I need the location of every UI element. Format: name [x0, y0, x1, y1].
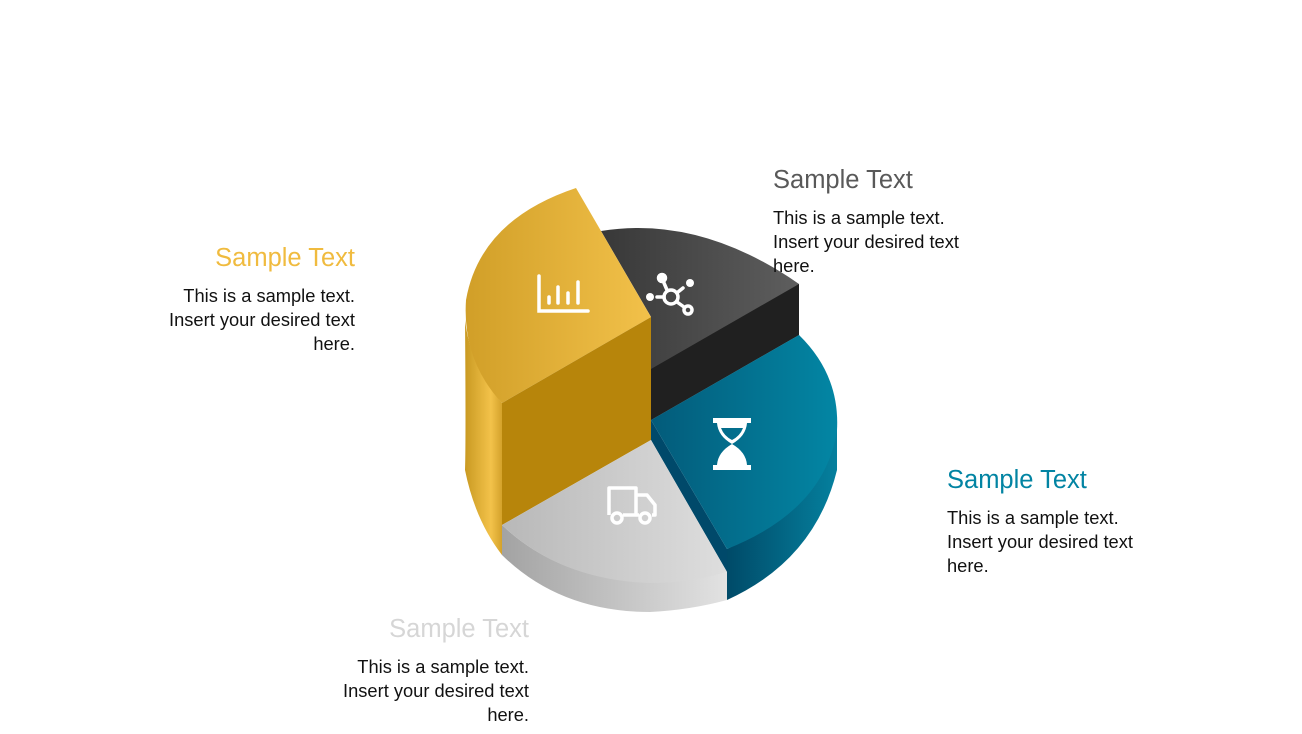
- text block: gold: This is a sample text.: [183, 285, 355, 306]
- text block: teal: This is a sample text.: [947, 507, 1119, 528]
- text block: dark grey: here.: [773, 255, 815, 276]
- text block: gold: [169, 244, 355, 354]
- text block: teal: Sample Text: [947, 466, 1087, 494]
- text block: teal: here.: [947, 555, 989, 576]
- text block: gold: Insert your desired text: [169, 309, 355, 330]
- text block: light grey: here.: [487, 704, 529, 725]
- text block: light grey: Sample Text: [389, 615, 529, 643]
- text block: dark grey: [773, 166, 959, 276]
- text block: dark grey: This is a sample text.: [773, 207, 945, 228]
- text block: light grey: This is a sample text.: [357, 656, 529, 677]
- segment: dark grey: [601, 228, 799, 420]
- text block: gold: Sample Text: [215, 244, 355, 272]
- icon: network: [646, 274, 694, 314]
- segment: light grey: [502, 440, 727, 612]
- icon: bar chart: [539, 276, 588, 311]
- icon: hourglass: [713, 418, 751, 470]
- text block: teal: [947, 466, 1133, 576]
- segment: gold: [465, 188, 651, 555]
- segment: teal: [651, 335, 837, 600]
- text block: gold: here.: [313, 333, 355, 354]
- text block: dark grey: Insert your desired text: [773, 231, 959, 252]
- text block: light grey: [343, 615, 529, 725]
- text block: teal: Insert your desired text: [947, 531, 1133, 552]
- text block: dark grey: Sample Text: [773, 166, 913, 194]
- text block: light grey: Insert your desired text: [343, 680, 529, 701]
- icon: truck: [609, 488, 655, 523]
